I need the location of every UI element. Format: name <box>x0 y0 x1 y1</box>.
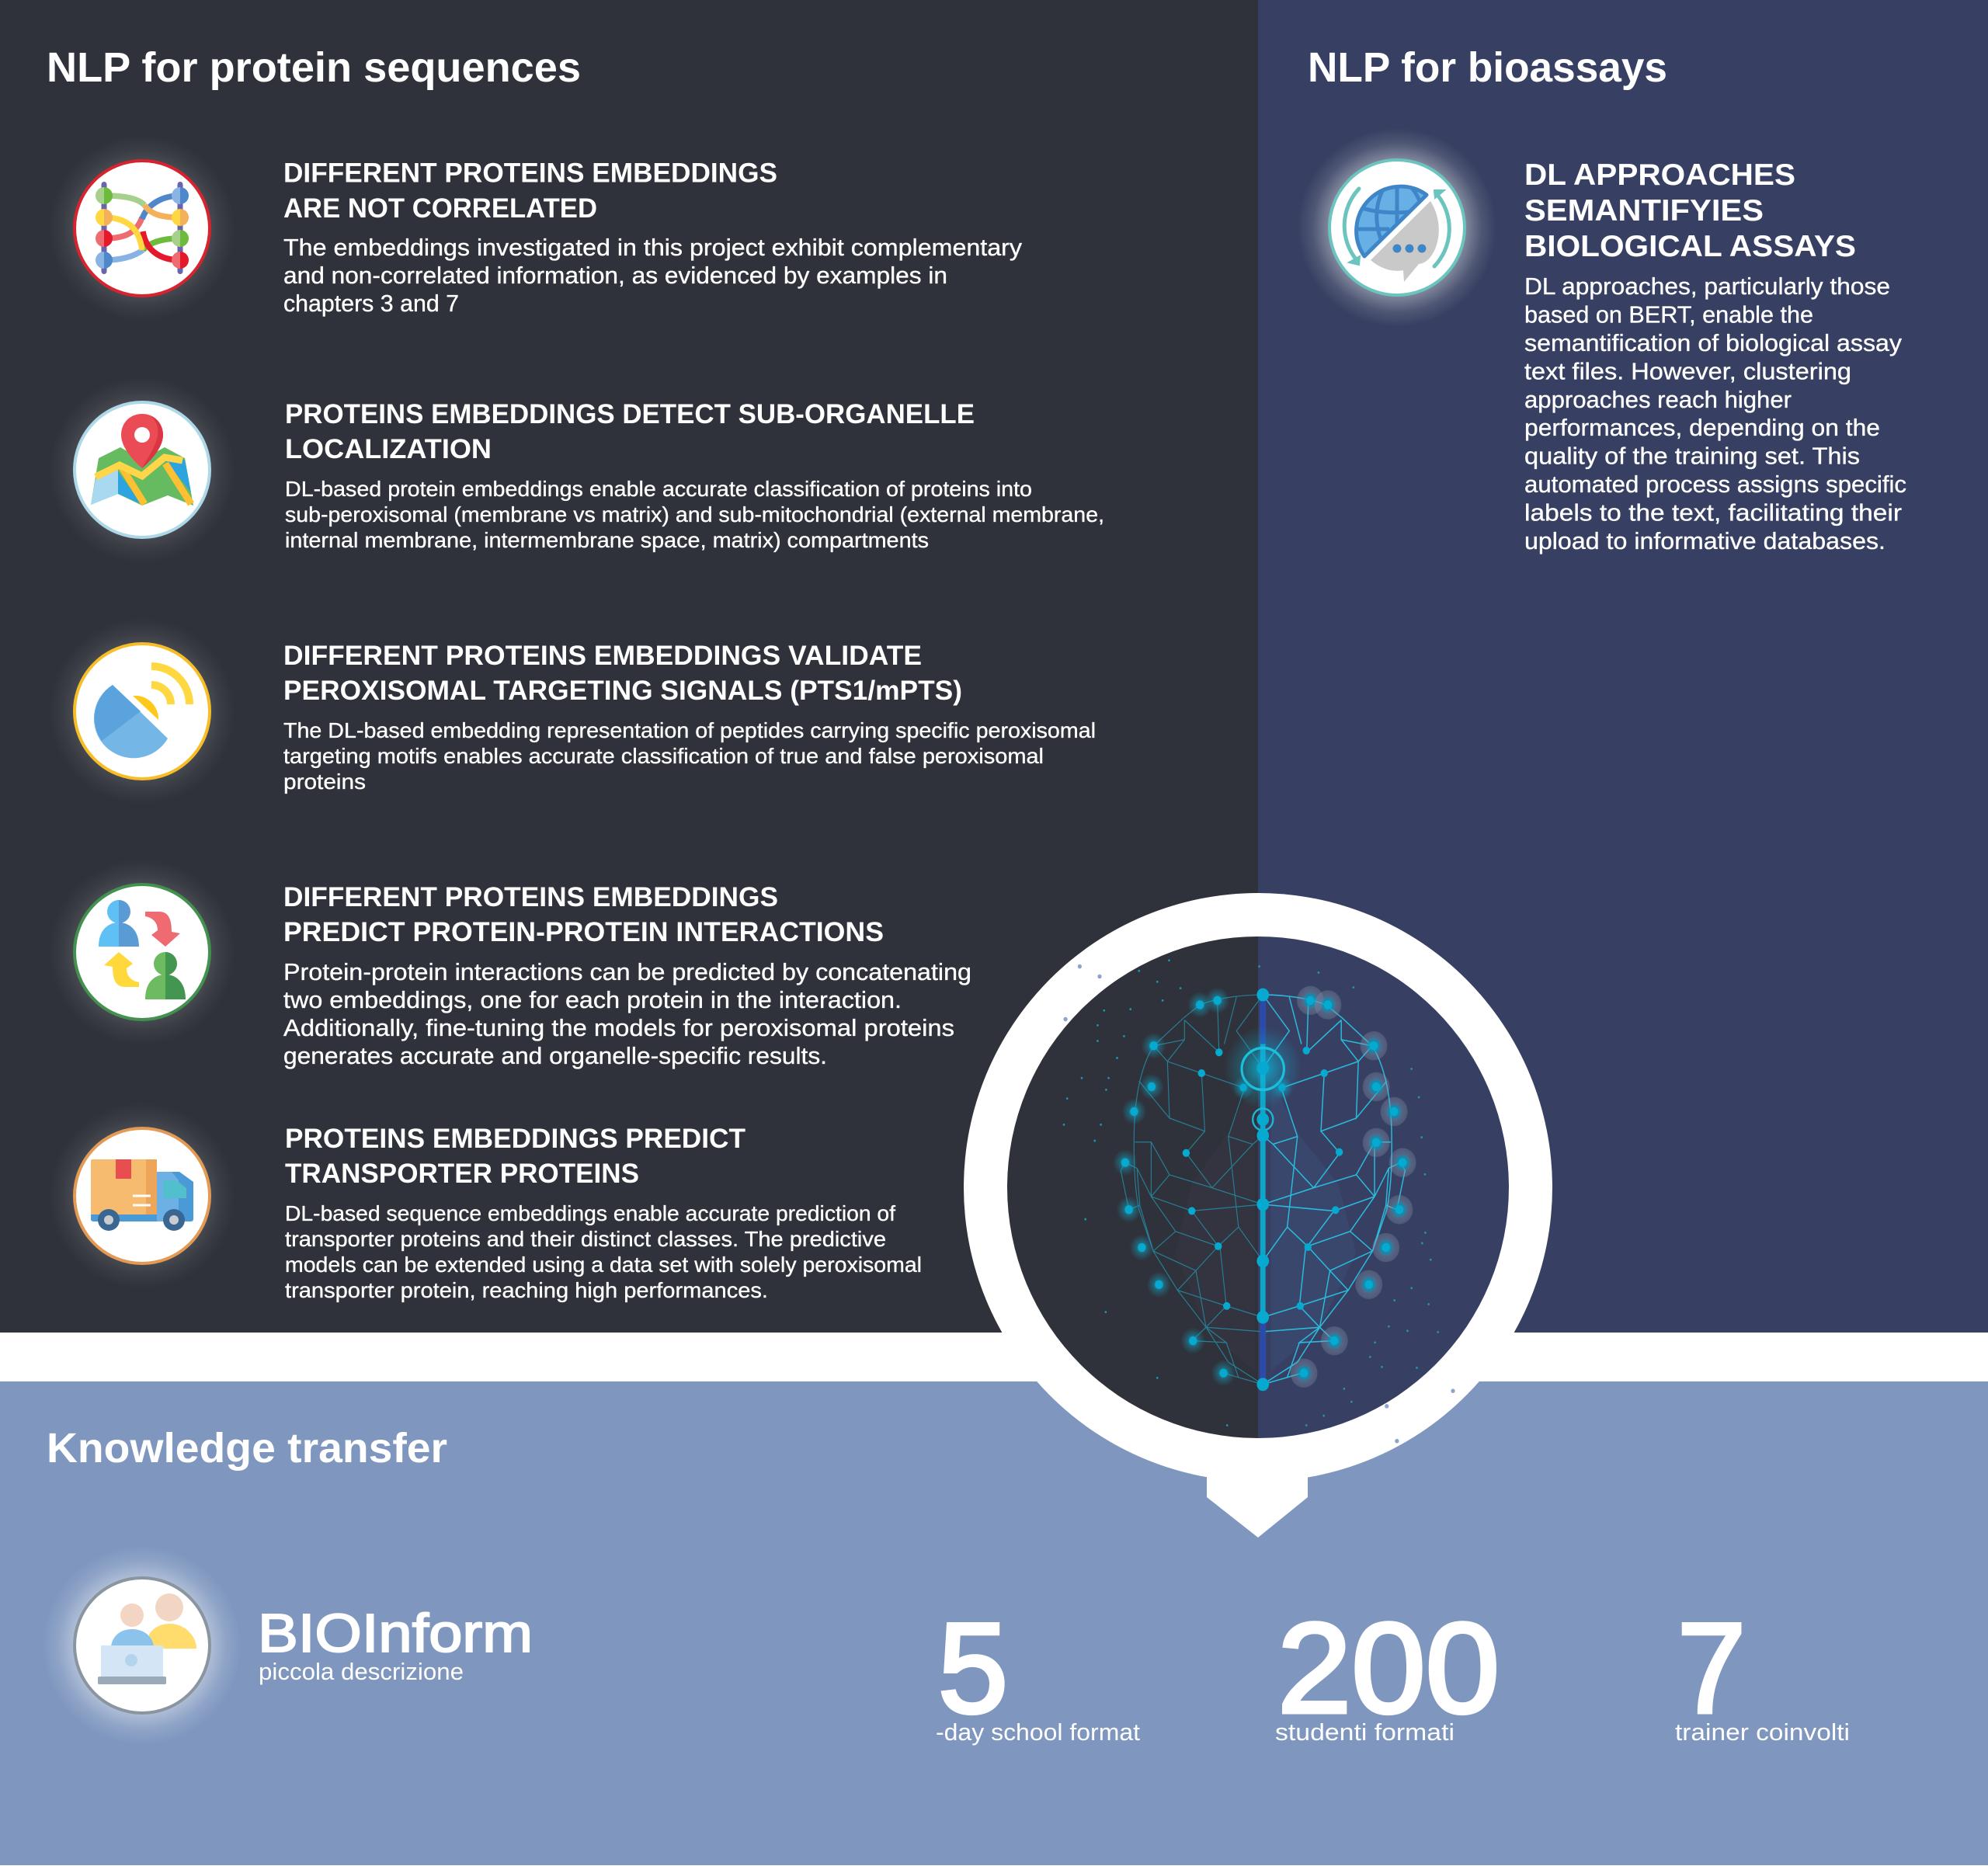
text block: DL approaches semantify biological assays: based on BERT, enable the <box>1524 301 1813 328</box>
panel: knowledge transfer background <box>0 1381 1988 1865</box>
text block: DL approaches semantify biological assays: text files. However, clustering <box>1524 357 1851 384</box>
heading: NLP for protein sequences: NLP for protein sequences <box>47 44 581 91</box>
text block: protein-protein interactions: PREDICT PROTEIN-PROTEIN INTERACTIONS <box>283 917 884 947</box>
panel: NLP for protein sequences background <box>0 0 1258 1333</box>
stat: 7 trainer coinvolti: 7 <box>1677 1597 1746 1739</box>
stat: 7 trainer coinvolti <box>1675 1597 1850 1746</box>
text block: peroxisomal targeting signals: The DL-based embedding representation of peptides carrying specific peroxisomal <box>283 718 1096 742</box>
panel: NLP for bioassays background <box>1258 0 1988 1333</box>
illustration: neural network head <box>1063 961 1455 1444</box>
text block: DL approaches semantify biological assays: DL APPROACHES <box>1524 158 1795 192</box>
text block: protein-protein interactions: Additionally, fine-tuning the models for peroxisomal proteins <box>283 1014 954 1041</box>
text block: DL approaches semantify biological assays: quality of the training set. This <box>1524 443 1860 470</box>
stat: 200 studenti formati: 200 <box>1277 1597 1500 1739</box>
central badge: white ring with pointer <box>964 893 1552 1538</box>
icon: embedding correlation network <box>49 135 235 321</box>
text block: sub-organelle localization: internal membrane, intermembrane space, matrix) compartments <box>285 528 929 552</box>
text block: sub-organelle localization: PROTEINS EMBEDDINGS DETECT SUB-ORGANELLE <box>285 399 975 429</box>
text block: DL approaches semantify biological assays: performances, depending on the <box>1524 414 1880 441</box>
text block: transporter proteins: models can be extended using a data set with solely peroxisomal <box>285 1253 922 1277</box>
text block: sub-organelle localization <box>285 399 1104 552</box>
text block: peroxisomal targeting signals: proteins <box>283 770 366 794</box>
text block: peroxisomal targeting signals: targeting motifs enables accurate classification of true and false peroxisomal <box>283 744 1044 768</box>
text block: transporter proteins: transporter protein, reaching high performances. <box>285 1278 768 1302</box>
text block: DL approaches semantify biological assays: upload to informative databases. <box>1524 527 1885 554</box>
text block: BIOInform: piccola descrizione <box>259 1658 464 1685</box>
text block: DL approaches semantify biological assays <box>1524 158 1906 554</box>
text block: peroxisomal targeting signals: DIFFERENT PROTEINS EMBEDDINGS VALIDATE <box>283 641 922 671</box>
text block: DL approaches semantify biological assays: semantification of biological assay <box>1524 329 1903 356</box>
text block: peroxisomal targeting signals: PEROXISOMAL TARGETING SIGNALS (PTS1/mPTS) <box>283 676 962 706</box>
text block: DL approaches semantify biological assays: DL approaches, particularly those <box>1524 273 1890 300</box>
text block: transporter proteins <box>285 1124 922 1302</box>
text block: embeddings not correlated: and non-correlated information, as evidenced by examples in <box>283 262 947 289</box>
text block: sub-organelle localization: LOCALIZATION <box>285 434 492 464</box>
icon: map with location pin <box>49 377 235 563</box>
text block: embeddings not correlated: The embeddings investigated in this project exhibit complementary <box>283 234 1023 261</box>
text block: embeddings not correlated <box>283 158 1023 317</box>
icon: delivery truck <box>49 1103 235 1289</box>
icon: satellite dish <box>49 618 235 804</box>
text block: DL approaches semantify biological assays: automated process assigns specific <box>1524 471 1906 498</box>
text block: transporter proteins: transporter proteins and their distinct classes. The predictive <box>285 1227 886 1251</box>
text block: transporter proteins: PROTEINS EMBEDDINGS PREDICT <box>285 1124 746 1154</box>
text block: transporter proteins: DL-based sequence embeddings enable accurate prediction of <box>285 1201 895 1225</box>
icon: globe and speech bubble <box>1303 134 1491 321</box>
text block: embeddings not correlated: DIFFERENT PROTEINS EMBEDDINGS <box>283 158 777 188</box>
text block: DL approaches semantify biological assays: SEMANTIFYIES <box>1524 194 1764 228</box>
text block: protein-protein interactions: Protein-protein interactions can be predicted by concatenating <box>283 958 971 985</box>
text block: protein-protein interactions: generates accurate and organelle-specific results. <box>283 1042 827 1069</box>
stat: 200 studenti formati: studenti formati <box>1275 1718 1455 1746</box>
central circle: dark and navy halves <box>1007 936 1509 1438</box>
heading: NLP for bioassays: NLP for bioassays <box>1308 44 1667 91</box>
text block: DL approaches semantify biological assays: BIOLOGICAL ASSAYS <box>1524 230 1856 263</box>
heading: Knowledge transfer: Knowledge transfer <box>47 1425 447 1472</box>
text block: embeddings not correlated: chapters 3 and 7 <box>283 290 459 317</box>
text block: sub-organelle localization: sub-peroxisomal (membrane vs matrix) and sub-mitochondrial (external membrane, <box>285 502 1104 526</box>
stat: 7 trainer coinvolti: trainer coinvolti <box>1675 1718 1850 1746</box>
text block: DL approaches semantify biological assays: approaches reach higher <box>1524 386 1792 413</box>
text block: peroxisomal targeting signals <box>283 641 1096 794</box>
text block: embeddings not correlated: ARE NOT CORRELATED <box>283 193 597 224</box>
stat: 5-day school format: 5 <box>938 1597 1008 1739</box>
text block: sub-organelle localization: DL-based protein embeddings enable accurate classification of proteins into <box>285 477 1032 501</box>
icon: people with laptop <box>43 1546 242 1745</box>
stat: 5-day school format: -day school format <box>936 1718 1140 1746</box>
text block: protein-protein interactions: two embeddings, one for each protein in the interaction. <box>283 986 902 1013</box>
text block: protein-protein interactions <box>283 882 971 1069</box>
text block: BIOInform <box>258 1603 533 1685</box>
icon: people exchanging arrows <box>49 859 235 1045</box>
text block: BIOInform: BIOInform <box>258 1603 533 1663</box>
text block: transporter proteins: TRANSPORTER PROTEINS <box>285 1159 639 1189</box>
text block: protein-protein interactions: DIFFERENT PROTEINS EMBEDDINGS <box>283 882 778 912</box>
text block: DL approaches semantify biological assays: labels to the text, facilitating their <box>1524 499 1902 526</box>
stat: 5-day school format <box>936 1597 1140 1746</box>
